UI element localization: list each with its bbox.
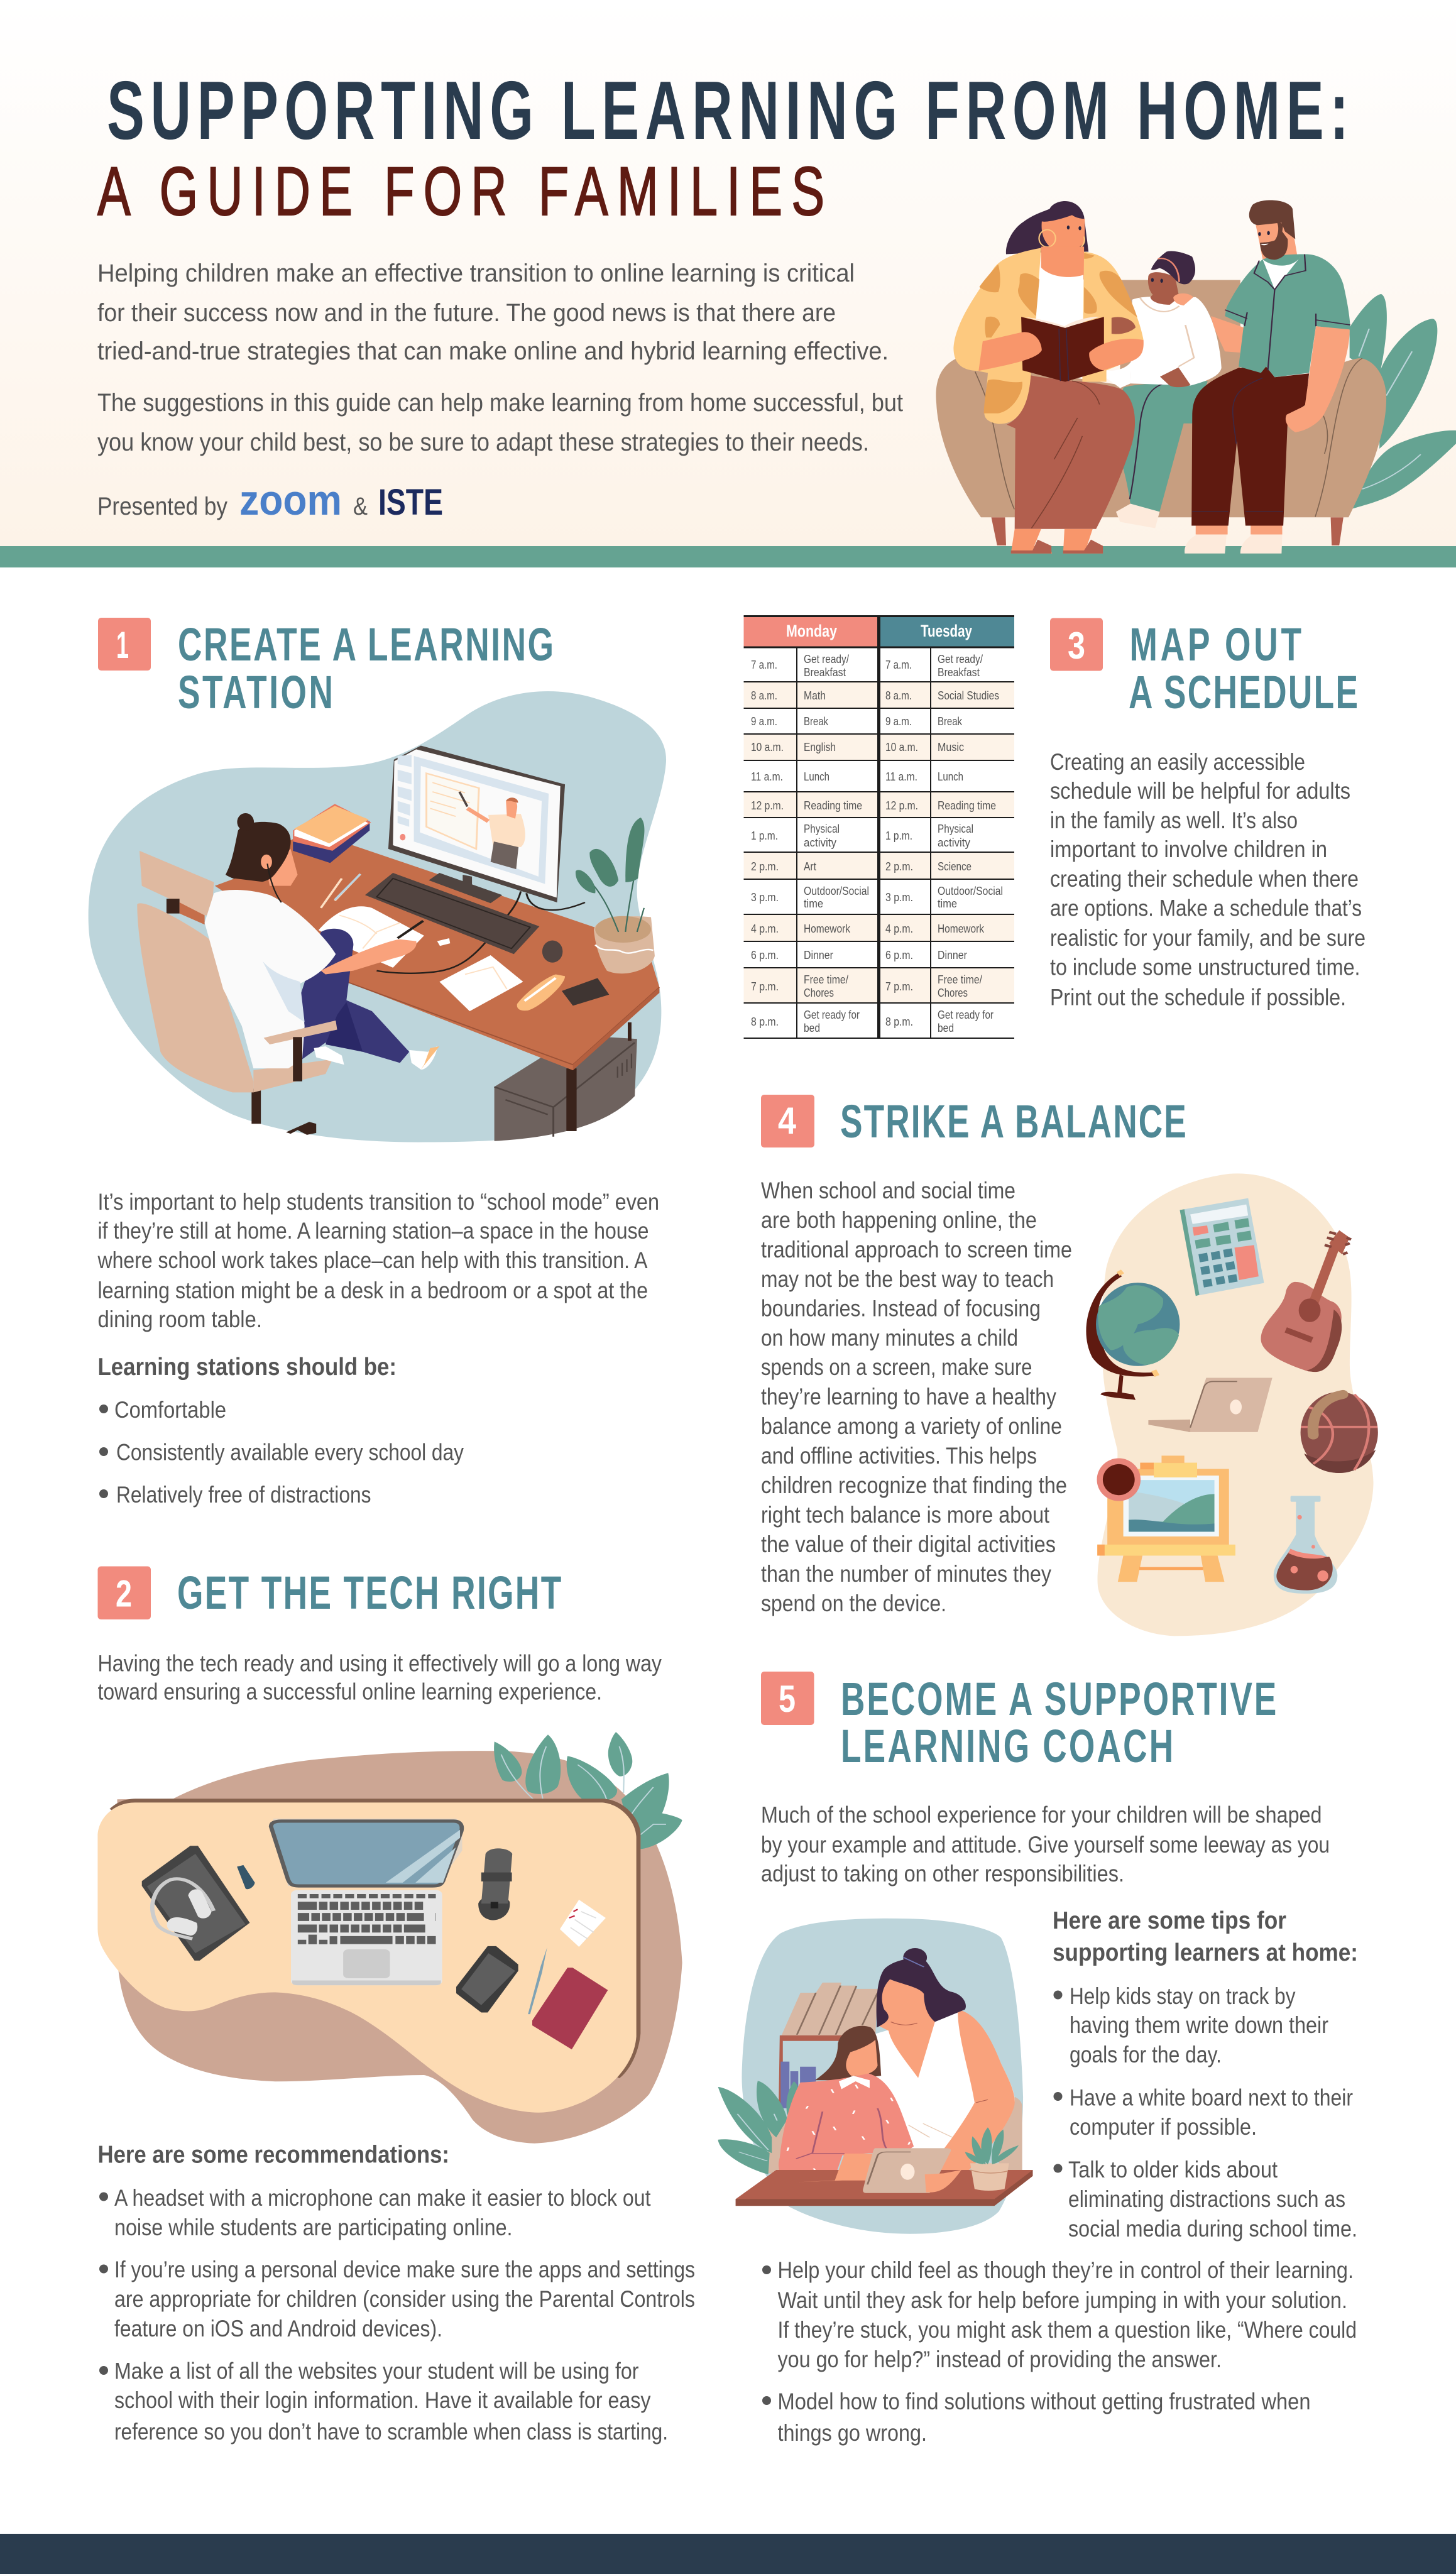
text: balance body bbox=[761, 1178, 1072, 1616]
table rows: time bbox=[804, 897, 823, 910]
table rows: Reading time bbox=[804, 799, 862, 812]
icon: globe bbox=[1086, 1271, 1180, 1400]
icon: flask bbox=[1274, 1496, 1337, 1594]
panel: section 4 strike a balance bbox=[761, 1095, 1378, 1636]
table rows: 2 p.m. bbox=[885, 860, 913, 873]
bullet list: tips long bbox=[762, 2257, 1357, 2446]
bullet list: recommendations: If you’re using a personal device make sure the apps and settings bbox=[114, 2257, 695, 2282]
table header Tuesday bbox=[880, 616, 1014, 647]
presented by logos: & bbox=[353, 493, 368, 520]
bullet list: tips long: Model how to find solutions without getting frustrated when bbox=[778, 2389, 1311, 2414]
bullet list: tips short: computer if possible. bbox=[1070, 2114, 1257, 2140]
text: tech intro: toward ensuring a successful online learning experience. bbox=[98, 1679, 602, 1704]
text: schedule body bbox=[1050, 749, 1366, 1010]
text: coach intro: by your example and attitude. Give yourself some leeway as you bbox=[761, 1832, 1330, 1858]
table rows: Outdoor/Social bbox=[804, 885, 869, 897]
table rows: activity bbox=[938, 836, 970, 849]
bullet list: tips short: social media during school time. bbox=[1068, 2216, 1357, 2242]
table rows: 9 a.m. bbox=[751, 715, 777, 728]
text: balance body: the value of their digital activities bbox=[761, 1531, 1056, 1557]
presented by logos bbox=[97, 476, 443, 524]
table rows: 8 p.m. bbox=[885, 1016, 913, 1028]
icon: calculator bbox=[1180, 1198, 1264, 1296]
bullet list: recommendations: noise while students are participating online. bbox=[114, 2215, 513, 2240]
text: balance body: boundaries. Instead of focusing bbox=[761, 1296, 1041, 1321]
heading 1: CREATE A LEARNING bbox=[178, 618, 554, 671]
bullet list: learning stations bbox=[99, 1397, 464, 1508]
bullet list: tips short: Help kids stay on track by bbox=[1070, 1983, 1296, 2009]
table rows: 12 p.m. bbox=[751, 799, 784, 812]
table rows: 8 a.m. bbox=[885, 689, 912, 702]
heading 3: MAP OUT bbox=[1130, 618, 1301, 671]
intro text bbox=[97, 260, 903, 456]
table rows: 8 p.m. bbox=[751, 1016, 779, 1028]
subheading: tips bbox=[1053, 1907, 1358, 1966]
table rows: Chores bbox=[938, 987, 968, 999]
text: learning station intro bbox=[97, 1189, 659, 1332]
bullet list: tips short bbox=[1053, 1983, 1357, 2242]
text: coach intro: Much of the school experience for your children will be shaped bbox=[761, 1802, 1322, 1827]
table rows: 7 a.m. bbox=[885, 659, 912, 671]
table rows: Math bbox=[804, 689, 826, 702]
table rows: 6 p.m. bbox=[751, 949, 779, 961]
text: coach intro: adjust to taking on other responsibilities. bbox=[761, 1861, 1124, 1887]
subheading: tips: supporting learners at home: bbox=[1053, 1939, 1358, 1966]
bullet list: recommendations: feature on iOS and Android devices). bbox=[114, 2316, 442, 2341]
table rows: 7 p.m. bbox=[885, 980, 913, 993]
text: balance body: they’re learning to have a healthy bbox=[761, 1384, 1056, 1410]
heading 3 bbox=[1129, 618, 1358, 718]
table rows: Reading time bbox=[938, 799, 996, 812]
footer band bbox=[0, 2534, 1456, 2574]
table rows: time bbox=[938, 897, 957, 910]
illustration: student at desk bbox=[89, 691, 666, 1142]
table rows: Dinner bbox=[938, 949, 967, 961]
text: schedule body: Print out the schedule if possible. bbox=[1050, 984, 1346, 1010]
bullet list: tips short: eliminating distractions such as bbox=[1068, 2186, 1345, 2212]
bullet list: learning stations: Comfortable bbox=[114, 1397, 226, 1423]
table rows: 11 a.m. bbox=[885, 770, 917, 783]
subheading: tips: Here are some tips for bbox=[1053, 1907, 1286, 1934]
table rows: 2 p.m. bbox=[751, 860, 779, 873]
text: schedule body: Creating an easily accessible bbox=[1050, 749, 1305, 775]
text: balance body: are both happening online, the bbox=[761, 1207, 1037, 1233]
heading 2: GET THE TECH RIGHT bbox=[177, 1567, 561, 1619]
text: balance body: When school and social time bbox=[761, 1178, 1015, 1203]
table rows: Breakfast bbox=[804, 666, 846, 679]
bullet list: tips short: having them write down their bbox=[1070, 2012, 1328, 2038]
panel: header bbox=[97, 64, 1456, 554]
panel: section 3 map out a schedule bbox=[1050, 618, 1366, 1010]
table rows: Get ready/ bbox=[938, 653, 983, 665]
subheading: learning stations should be: Learning stations should be: bbox=[98, 1354, 397, 1381]
table rows: Get ready for bbox=[938, 1009, 993, 1021]
bullet list: tips long: you go for help?” instead of providing the answer. bbox=[778, 2347, 1222, 2372]
heading 5: LEARNING COACH bbox=[841, 1720, 1173, 1772]
icon: basketball bbox=[1301, 1392, 1378, 1473]
text: balance body: balance among a variety of online bbox=[761, 1413, 1062, 1439]
text: coach intro bbox=[761, 1802, 1330, 1887]
text: schedule body: important to involve children in bbox=[1050, 836, 1327, 862]
table rows: Physical bbox=[804, 823, 840, 835]
text: balance body: on how many minutes a child bbox=[761, 1325, 1018, 1351]
intro text: tried-and-true strategies that can make online and hybrid learning effective. bbox=[97, 337, 889, 365]
text: learning station intro: It’s important to help students transition to “school mode” even bbox=[98, 1189, 659, 1215]
table rows: 3 p.m. bbox=[885, 891, 913, 904]
table rows: Homework bbox=[938, 923, 985, 935]
illustration: parent and child with tablet bbox=[718, 1919, 1032, 2234]
table rows: 10 a.m. bbox=[751, 741, 784, 753]
text: balance body: than the number of minutes they bbox=[761, 1561, 1051, 1587]
table rows: English bbox=[804, 741, 836, 753]
text: learning station intro: learning station might be a desk in a bedroom or a spot at the bbox=[98, 1278, 648, 1303]
badge 1 bbox=[98, 618, 151, 671]
text: balance body: right tech balance is more about bbox=[761, 1502, 1050, 1528]
table rows bbox=[751, 653, 1003, 1034]
bullet list: recommendations: A headset with a microphone can make it easier to block out bbox=[114, 2185, 651, 2211]
table rows: Science bbox=[938, 860, 972, 873]
table rows: 1 p.m. bbox=[885, 830, 912, 842]
table rows: 4 p.m. bbox=[885, 923, 913, 935]
presented by logos: ISTE bbox=[378, 482, 443, 523]
bullet list: recommendations: Make a list of all the websites your student will be using for bbox=[114, 2358, 638, 2384]
table rows: Physical bbox=[938, 823, 973, 835]
heading 4: STRIKE A BALANCE bbox=[840, 1095, 1186, 1147]
text: schedule body: are options. Make a schedule that’s bbox=[1050, 895, 1362, 921]
text: balance body: spend on the device. bbox=[761, 1591, 946, 1616]
table rows: Break bbox=[804, 715, 829, 728]
bullet list: recommendations: reference so you don’t have to scramble when class is starting. bbox=[114, 2419, 668, 2445]
table rows: 7 a.m. bbox=[751, 659, 777, 671]
green header band bbox=[0, 546, 1456, 567]
table header Tuesday: Tuesday bbox=[921, 622, 972, 640]
table rows: Outdoor/Social bbox=[938, 885, 1003, 897]
header background bbox=[0, 0, 1456, 546]
table rows: Dinner bbox=[804, 949, 833, 961]
badge 5 bbox=[761, 1672, 814, 1725]
text: learning station intro: where school work takes place–can help with this transition. A bbox=[97, 1247, 648, 1273]
bullet list: tips short: Talk to older kids about bbox=[1068, 2157, 1278, 2182]
intro text: Helping children make an effective transition to online learning is critical bbox=[97, 260, 855, 287]
bullet list: recommendations: are appropriate for children (consider using the Parental Controls bbox=[114, 2286, 695, 2312]
text: schedule body: creating their schedule when there bbox=[1050, 866, 1359, 892]
bullet list: tips long: Help your child feel as though they’re in control of their learning. bbox=[778, 2257, 1354, 2283]
text: tech intro: Having the tech ready and using it effectively will go a long way bbox=[98, 1650, 662, 1677]
heading 3: A SCHEDULE bbox=[1129, 666, 1358, 718]
illustration: balance activities bbox=[1086, 1173, 1378, 1636]
table rows: Homework bbox=[804, 923, 851, 935]
text: balance body: and offline activities. This helps bbox=[761, 1443, 1037, 1469]
icon: laptop bbox=[1148, 1378, 1273, 1432]
bullet list: tips long: Wait until they ask for help before jumping in with your solution. bbox=[778, 2287, 1347, 2313]
text: balance body: may not be the best way to teach bbox=[761, 1266, 1054, 1292]
table rows: 7 p.m. bbox=[751, 980, 779, 993]
bullet list: tips long: If they’re stuck, you might ask them a question like, “Where could bbox=[778, 2317, 1357, 2343]
table rows: 1 p.m. bbox=[751, 830, 778, 842]
intro text: for their success now and in the future. The good news is that there are bbox=[97, 299, 836, 327]
table rows: Get ready for bbox=[804, 1009, 860, 1021]
table rows: Free time/ bbox=[804, 973, 848, 986]
table rows: Lunch bbox=[938, 770, 963, 783]
bullet list: learning stations: Relatively free of distractions bbox=[116, 1482, 371, 1508]
text: learning station intro: dining room table. bbox=[98, 1306, 262, 1332]
table rows: Get ready/ bbox=[804, 653, 849, 665]
badge 3 bbox=[1050, 618, 1103, 671]
text: tech intro bbox=[98, 1650, 662, 1704]
text: balance body: spends on a screen, make sure bbox=[761, 1354, 1032, 1380]
bullet list: tips short: goals for the day. bbox=[1070, 2042, 1222, 2067]
heading 5 bbox=[841, 1673, 1276, 1772]
table rows: 4 p.m. bbox=[751, 923, 779, 935]
presented by logos: Presented by bbox=[97, 493, 227, 520]
bullet list: recommendations: school with their login information. Have it available for easy bbox=[114, 2387, 651, 2413]
table rows: 3 p.m. bbox=[751, 891, 779, 904]
text: schedule body: realistic for your family, and be sure bbox=[1050, 925, 1366, 951]
subtitle: A GUIDE FOR FAMILIES bbox=[97, 153, 824, 230]
bullet list: learning stations: Consistently available every school day bbox=[116, 1439, 464, 1465]
table header Monday: Monday bbox=[786, 622, 837, 640]
panel: weekly schedule table bbox=[744, 616, 1014, 1038]
table rows: 10 a.m. bbox=[885, 741, 918, 753]
table rows: Art bbox=[804, 860, 816, 873]
table rows: Free time/ bbox=[938, 973, 982, 986]
badge 1: 1 bbox=[116, 624, 129, 666]
table rows: bed bbox=[804, 1022, 820, 1034]
table rows: 11 a.m. bbox=[751, 770, 783, 783]
table rows: 6 p.m. bbox=[885, 949, 913, 961]
bullet list: tips long: things go wrong. bbox=[778, 2420, 927, 2446]
text: schedule body: to include some unstructured time. bbox=[1050, 954, 1360, 980]
illustration: family on sofa bbox=[936, 200, 1456, 554]
badge 4 bbox=[761, 1095, 814, 1147]
table rows: Social Studies bbox=[938, 689, 999, 702]
badge 5: 5 bbox=[779, 1678, 796, 1720]
badge 2 bbox=[98, 1566, 151, 1619]
heading 1: STATION bbox=[178, 666, 333, 718]
panel: section 1 create a learning station bbox=[89, 618, 666, 1508]
icon: guitar bbox=[1261, 1230, 1351, 1372]
table rows: Breakfast bbox=[938, 666, 980, 679]
table rows: bed bbox=[938, 1022, 954, 1034]
text: schedule body: in the family as well. It’s also bbox=[1050, 808, 1298, 833]
table rows: Lunch bbox=[804, 770, 829, 783]
subheading: recommendations: Here are some recommendations: bbox=[98, 2142, 449, 2168]
text: balance body: traditional approach to screen time bbox=[761, 1237, 1072, 1262]
table rows: 8 a.m. bbox=[751, 689, 777, 702]
badge 4: 4 bbox=[778, 1100, 797, 1142]
intro text: you know your child best, so be sure to adapt these strategies to their needs. bbox=[97, 429, 869, 456]
table rows: Chores bbox=[804, 987, 834, 999]
heading 5: BECOME A SUPPORTIVE bbox=[841, 1673, 1276, 1725]
badge 3: 3 bbox=[1068, 625, 1085, 667]
text: schedule body: schedule will be helpful for adults bbox=[1050, 778, 1350, 804]
bullet list: tips short: Have a white board next to their bbox=[1070, 2085, 1353, 2110]
table rows: Music bbox=[938, 741, 964, 753]
presented by logos: zoom bbox=[239, 476, 342, 524]
badge 2: 2 bbox=[116, 1572, 132, 1615]
panel: section 5 become a supportive learning coach bbox=[718, 1672, 1358, 2446]
table rows: 12 p.m. bbox=[885, 799, 918, 812]
text: learning station intro: if they’re still at home. A learning station–a space in the house bbox=[98, 1218, 649, 1244]
table rows: Break bbox=[938, 715, 963, 728]
intro text: The suggestions in this guide can help make learning from home successful, but bbox=[97, 389, 903, 417]
table header Monday bbox=[744, 616, 879, 647]
text: balance body: children recognize that finding the bbox=[761, 1472, 1067, 1498]
table rows: 9 a.m. bbox=[885, 715, 912, 728]
table rows: activity bbox=[804, 836, 836, 849]
heading 1 bbox=[178, 618, 554, 718]
panel: section 2 get the tech right bbox=[97, 1566, 695, 2445]
illustration: desk with devices bbox=[97, 1732, 682, 2144]
bullet list: recommendations bbox=[99, 2185, 695, 2445]
title: SUPPORTING LEARNING FROM HOME: bbox=[107, 64, 1349, 156]
icon: easel with painting bbox=[1097, 1455, 1235, 1582]
